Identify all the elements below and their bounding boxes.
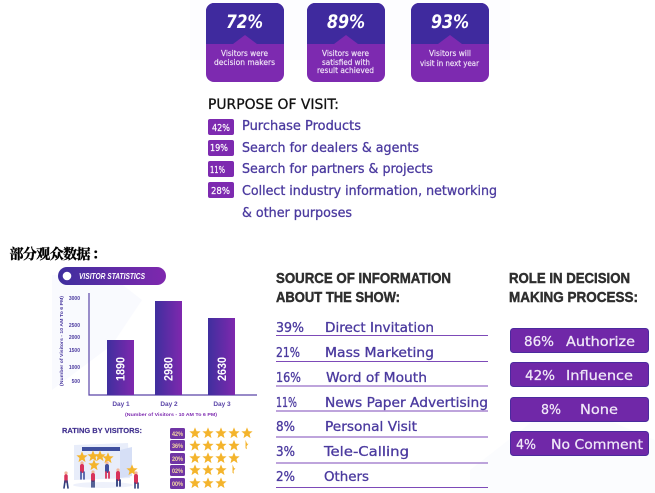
rating rows xyxy=(170,427,253,489)
list: source of information: 16% xyxy=(276,371,301,386)
heading: role in decision making: MAKING PROCESS: xyxy=(509,290,638,306)
illustration: people holding stars xyxy=(64,443,138,488)
list: source of information: 2% xyxy=(276,470,295,485)
y axis ticks: 1000 xyxy=(69,365,80,371)
role pill: no comment: 4% xyxy=(516,437,536,453)
list: purpose of visit: 19% xyxy=(210,143,228,154)
list: purpose of visit: Search for dealers & agents xyxy=(242,141,419,156)
role pill: authorize xyxy=(510,328,648,352)
list: purpose of visit: & other purposes xyxy=(242,206,352,221)
list: source of information: 11% xyxy=(276,396,297,411)
y axis ticks: 500 xyxy=(72,379,80,385)
list: purpose of visit: Collect industry information, networking xyxy=(242,184,497,199)
role pill: influence: 42% xyxy=(525,368,555,384)
list: purpose of visit: 11% xyxy=(210,165,225,176)
bar: day 2: 2980 xyxy=(164,357,176,381)
role pill: authorize: Authorize xyxy=(566,334,635,350)
list: purpose of visit: 28% xyxy=(211,186,230,197)
stat card: 89% satisfied: result achieved xyxy=(317,66,374,75)
list: source of information: 21% xyxy=(276,346,300,361)
stat card: 89% satisfied: 89% xyxy=(327,11,365,33)
list: source of information: Others xyxy=(324,470,369,485)
stat card: 72% decision makers xyxy=(206,3,284,82)
x axis labels xyxy=(112,401,231,408)
rating row: 02% three and half stars: 02% xyxy=(172,469,184,475)
y axis ticks: 1500 xyxy=(69,348,80,354)
role pill: influence: Influence xyxy=(566,368,633,384)
heading: source of information: SOURCE OF INFORMATION xyxy=(276,271,451,287)
bar: day 1 xyxy=(107,340,134,395)
rating row: 00% three stars: 00% xyxy=(172,482,184,488)
role pill: none: None xyxy=(580,402,618,418)
list: source of information: Personal Visit xyxy=(325,420,417,435)
y axis title: (Number of Visitors - 10 AM To 6 PM) xyxy=(59,296,65,386)
stat card: 89% satisfied xyxy=(307,3,385,82)
y axis ticks: 2000 xyxy=(69,335,80,341)
x axis labels: Day 1 xyxy=(112,401,130,408)
x axis labels: Day 2 xyxy=(160,401,178,408)
pill: visitor statistics: VISITOR STATISTICS xyxy=(79,272,146,281)
x axis title: (Number of Visitors - 10 AM To 6 PM) xyxy=(125,412,217,418)
list: source of information: Mass Marketing xyxy=(325,346,434,361)
list: purpose of visit xyxy=(208,119,497,221)
list: source of information: 3% xyxy=(276,445,295,460)
list: source of information: Word of Mouth xyxy=(326,371,427,386)
rating row: 42% five stars: 42% xyxy=(172,432,184,438)
stat card: 72% decision makers: decision makers xyxy=(214,58,275,67)
y axis ticks: 3000 xyxy=(69,296,80,302)
list: purpose of visit: 42% xyxy=(212,123,230,134)
list: source of information: Tele-Calling xyxy=(323,445,409,460)
y axis ticks xyxy=(69,296,80,385)
stat card: 93% next year: 93% xyxy=(431,11,469,33)
list: source of information xyxy=(276,321,488,488)
list: source of information: News Paper Advertising xyxy=(325,396,488,411)
stat card: 93% next year xyxy=(411,3,489,82)
stat card: 89% satisfied: Visitors were xyxy=(322,49,369,58)
heading: role in decision making xyxy=(509,271,638,306)
role pill: no comment xyxy=(510,432,648,456)
list: purpose of visit: Search for partners & projects xyxy=(242,162,433,177)
y axis ticks: 2500 xyxy=(69,323,80,329)
bar: day 3 xyxy=(208,318,235,395)
stat card: 93% next year: Visitors will xyxy=(429,49,471,58)
bar: day 3: 2630 xyxy=(217,357,229,381)
heading: source of information xyxy=(276,271,451,306)
pill: visitor statistics xyxy=(58,267,166,285)
section title: partial audience data: 部分观众数据 xyxy=(10,246,90,263)
section title: partial audience data: ： xyxy=(92,248,106,263)
role pill: none xyxy=(510,398,648,422)
rating row: 36% four and half stars: 36% xyxy=(172,444,184,450)
stat card: 72% decision makers: 72% xyxy=(226,11,263,33)
stat card: 72% decision makers: Visitors were xyxy=(221,49,268,58)
list: source of information: 39% xyxy=(276,321,304,336)
list: source of information: Direct Invitation xyxy=(325,321,434,336)
role pill: none: 8% xyxy=(541,402,561,418)
heading: rating by visitors: RATING BY VISITORS: xyxy=(62,426,142,435)
heading: role in decision making: ROLE IN DECISION xyxy=(509,271,630,287)
role pill: influence xyxy=(510,362,648,386)
rating row: 20% four stars: 20% xyxy=(172,457,184,463)
bar: day 2 xyxy=(155,301,182,395)
role pill: no comment: No Comment xyxy=(551,437,643,453)
bar chart: visitors per day xyxy=(59,293,257,418)
stat card: 89% satisfied: satisfied with xyxy=(322,58,370,67)
role pill: authorize: 86% xyxy=(524,334,554,350)
x axis labels: Day 3 xyxy=(213,401,231,408)
heading: source of information: ABOUT THE SHOW: xyxy=(276,290,400,306)
list: source of information: 8% xyxy=(276,420,295,435)
stat card: 93% next year: visit in next year xyxy=(420,59,480,68)
heading: purpose of visit: PURPOSE OF VISIT: xyxy=(208,97,339,113)
list: purpose of visit: Purchase Products xyxy=(242,119,361,134)
bar: day 1: 1890 xyxy=(116,357,128,381)
